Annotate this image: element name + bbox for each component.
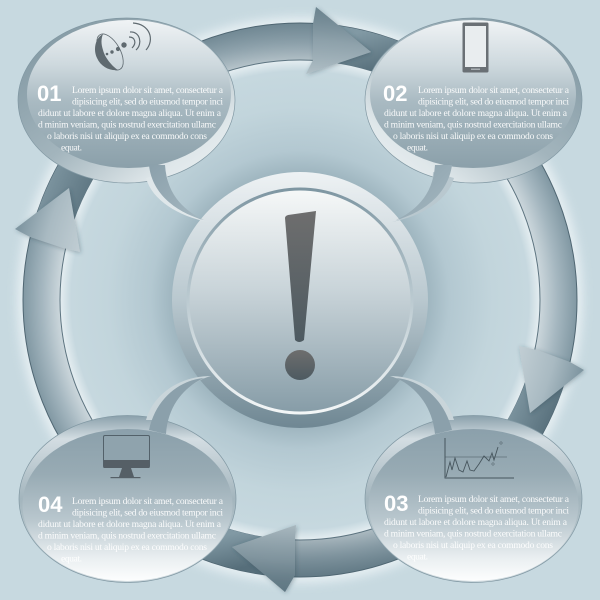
icon: desktop monitor [104, 436, 150, 478]
text block 03: equat. [407, 552, 428, 562]
text block 03: o laboris nisi ut aliquip ex ea commodo cons [393, 540, 553, 551]
icon: satellite dish [91, 23, 150, 74]
arrow: right [519, 346, 584, 413]
text block 03: didunt ut labore et dolore magna aliqua. Ut enim a [384, 517, 568, 528]
text block 02: dipisicing elit, sed do eiusmod tempor inci [418, 96, 569, 108]
inner field [59, 59, 541, 541]
text block 01: d minim veniam, quis nostrud exercitation ullamc [38, 120, 216, 130]
text block 02: o laboris nisi ut aliquip ex ea commodo cons [393, 131, 553, 142]
text block 02: d minim veniam, quis nostrud exercitation ullamc [384, 120, 562, 130]
text block 01: dipisicing elit, sed do eiusmod tempor inci [72, 96, 223, 108]
text block 02: Lorem ipsum dolor sit amet, consectetur a [418, 85, 570, 96]
text block 04: Lorem ipsum dolor sit amet, consectetur a [72, 496, 224, 507]
text block 04: didunt ut labore et dolore magna aliqua. Ut enim a [38, 519, 222, 530]
text block 04: o laboris nisi ut aliquip ex ea commodo cons [47, 542, 207, 553]
arrow: top [306, 7, 371, 74]
text block 03: d minim veniam, quis nostrud exercitation ullamc [384, 528, 562, 540]
text block 01: equat. [61, 142, 82, 154]
number 04: 04 [38, 492, 63, 517]
icon: exclamation mark [285, 211, 316, 380]
text block 01: didunt ut labore et dolore magna aliqua. Ut enim a [38, 108, 222, 119]
text block 02: equat. [407, 142, 428, 154]
text block 04: dipisicing elit, sed do eiusmod tempor inci [72, 508, 223, 518]
icon: line chart [445, 438, 514, 478]
text block 04: d minim veniam, quis nostrud exercitation ullamc [38, 530, 216, 542]
arrow: bottom [232, 525, 296, 592]
text block 01 [38, 85, 224, 154]
arrow: left [15, 188, 80, 252]
text block 01: o laboris nisi ut aliquip ex ea commodo cons [47, 131, 207, 142]
number 03: 03 [384, 491, 408, 516]
glow behind cycle ring [38, 38, 562, 562]
text block 04: equat. [61, 554, 82, 564]
arrow tail shadows [49, 42, 551, 558]
text block 01: Lorem ipsum dolor sit amet, consectetur a [72, 85, 224, 96]
panel: bubble 03 [365, 376, 582, 582]
text block 03 [384, 494, 570, 562]
text block 03: dipisicing elit, sed do eiusmod tempor inci [418, 506, 569, 516]
panel: bubble 04 [19, 376, 236, 582]
text block 02 [384, 85, 570, 154]
number 01: 01 [37, 81, 61, 106]
text block 03: Lorem ipsum dolor sit amet, consectetur a [418, 494, 570, 505]
icon: smartphone [462, 22, 488, 72]
text block 02: didunt ut labore et dolore magna aliqua. Ut enim a [384, 108, 568, 119]
panel: bubble 01 [18, 18, 235, 222]
text block 04 [38, 496, 224, 564]
central warning badge [172, 172, 428, 428]
number 02: 02 [383, 81, 407, 106]
panel: bubble 02 [365, 18, 582, 222]
